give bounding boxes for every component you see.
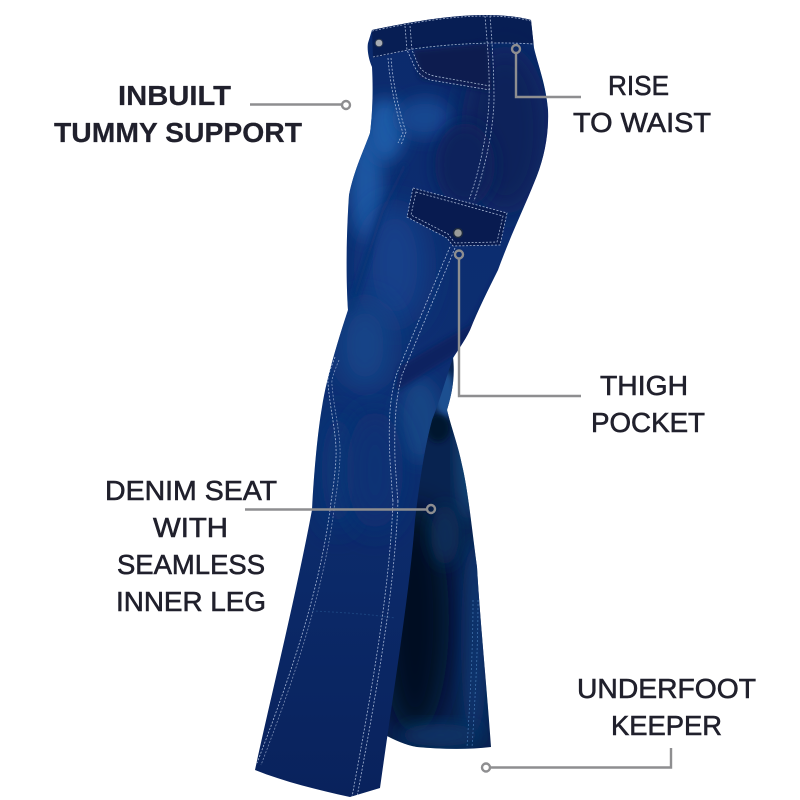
label: inbuilt tummy support [54, 80, 302, 148]
connector: tummy support [250, 101, 350, 109]
label: denim seat with seamless inner leg: WITH [153, 512, 228, 543]
label: thigh pocket [591, 370, 705, 438]
connector: underfoot keeper [482, 748, 671, 772]
label: rise to waist [573, 70, 711, 138]
label: denim seat with seamless inner leg: INNER LEG [116, 586, 266, 617]
connector: thigh pocket [455, 250, 581, 396]
connector: denim seat [245, 505, 435, 513]
label: inbuilt tummy support: INBUILT [118, 80, 231, 111]
cargo pocket flap [407, 188, 507, 246]
label: underfoot keeper: KEEPER [611, 710, 722, 741]
waistband [372, 15, 535, 58]
label: thigh pocket: THIGH [600, 370, 688, 401]
jeans illustration [255, 15, 548, 797]
front leg [255, 15, 548, 797]
buttons [375, 39, 383, 47]
label: inbuilt tummy support: TUMMY SUPPORT [54, 117, 302, 148]
label: rise to waist: TO WAIST [573, 107, 711, 138]
label: denim seat with seamless inner leg: SEAMLESS [117, 549, 265, 580]
waist pocket shade [413, 43, 492, 91]
label: denim seat with seamless inner leg [105, 475, 277, 617]
label: underfoot keeper: UNDERFOOT [577, 673, 756, 704]
label: denim seat with seamless inner leg: DENIM SEAT [105, 475, 277, 506]
label: thigh pocket: POCKET [591, 407, 705, 438]
label: underfoot keeper [577, 673, 756, 741]
label: rise to waist: RISE [608, 70, 669, 101]
stitching [257, 16, 533, 797]
rear leg [387, 358, 491, 749]
connector: rise to waist [512, 45, 581, 97]
